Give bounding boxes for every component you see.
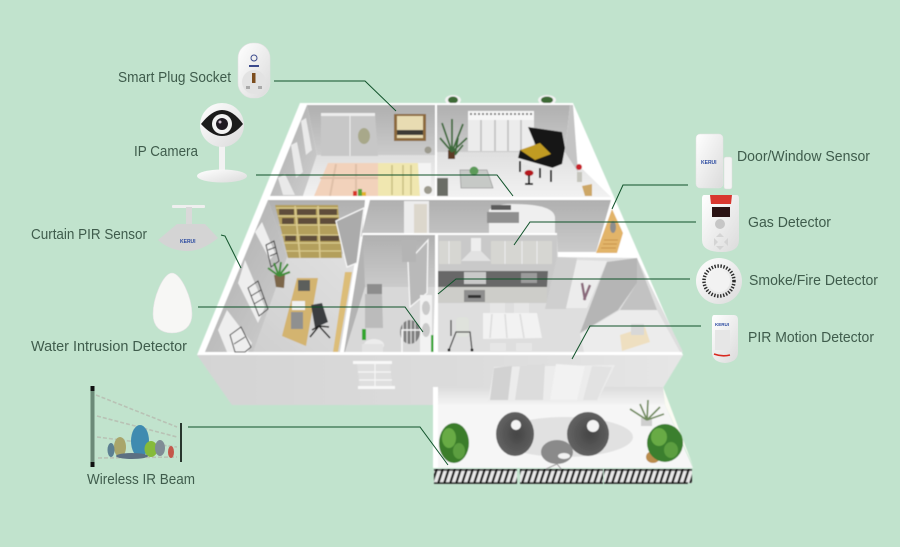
toys <box>353 189 366 196</box>
ottoman 1 <box>496 412 534 456</box>
garden shrubs behind house <box>445 95 556 105</box>
label: smoke fire: Smoke/Fire Detector <box>749 273 878 289</box>
dining chairs <box>490 303 532 351</box>
desk in right room <box>620 324 650 351</box>
picture <box>394 114 426 141</box>
house footprint wall tops <box>197 103 683 355</box>
railing <box>434 469 692 483</box>
vanity <box>420 295 432 352</box>
leader line: smoke <box>438 279 690 294</box>
open door <box>336 208 364 267</box>
washing machine <box>365 284 383 328</box>
plant left <box>439 423 469 463</box>
round table <box>541 440 573 470</box>
left wall windows <box>278 118 312 195</box>
room: bathroom <box>344 235 435 352</box>
front large patio window <box>488 364 615 402</box>
plant right <box>646 424 683 463</box>
wooden bench <box>333 272 352 352</box>
exercise equipment <box>582 283 590 300</box>
icon: smoke fire detector <box>696 258 742 304</box>
label: pir motion: PIR Motion Detector <box>748 330 874 346</box>
leader line: water <box>198 307 423 332</box>
leader line: ip camera <box>256 175 513 196</box>
leader line: gas <box>514 222 696 245</box>
dining table <box>483 313 542 339</box>
glass coffee table <box>460 166 493 188</box>
shower rail <box>402 330 422 352</box>
front small window <box>353 361 395 389</box>
icon: water intrusion detector <box>153 273 192 333</box>
windows on office wall <box>218 222 275 352</box>
side cabinet <box>437 178 448 196</box>
upper cabinets <box>439 241 552 264</box>
potted palm <box>440 119 467 159</box>
balcony back wall <box>437 387 665 405</box>
beams <box>96 395 177 458</box>
icon: pir motion detector <box>712 315 738 363</box>
leader line: smart plug <box>274 81 396 111</box>
window grilles <box>230 241 279 352</box>
label: smart plug: Smart Plug Socket <box>118 70 231 86</box>
bookshelf <box>275 205 342 258</box>
patio doors <box>468 111 534 151</box>
cartoon monsters <box>108 425 174 459</box>
leader line: door window <box>612 185 688 209</box>
doorway view <box>566 260 607 308</box>
label: door window: Door/Window Sensor <box>737 149 870 165</box>
room: office <box>205 200 365 352</box>
floor shadow <box>497 417 633 457</box>
balcony floor <box>435 405 693 468</box>
icon: wireless ir beam <box>90 386 182 467</box>
office chair <box>310 303 330 338</box>
label: gas detector: Gas Detector <box>748 215 831 231</box>
green towels <box>362 329 434 352</box>
wardrobe <box>321 113 378 156</box>
stroller <box>448 317 474 352</box>
right room back wall <box>620 258 657 310</box>
bedside lamps <box>424 146 432 194</box>
lower cabinets <box>438 287 547 303</box>
cooktop and sink <box>464 272 537 284</box>
partition wall <box>545 257 577 309</box>
balcony side wall <box>663 387 693 466</box>
leader line: ir beam <box>188 427 448 465</box>
striped rug <box>400 320 420 345</box>
icon: smart plug socket <box>238 43 270 98</box>
room: living room <box>437 105 611 197</box>
icon: curtain pir sensor <box>158 205 218 251</box>
plant back <box>630 400 664 426</box>
ottoman 2 <box>567 412 609 456</box>
grand piano <box>518 127 565 182</box>
leader line: curtain pir <box>221 235 241 268</box>
icon: door window sensor: KERUI <box>701 160 717 166</box>
doorway <box>402 240 416 262</box>
label: water intrusion: Water Intrusion Detector <box>31 339 187 355</box>
potted plant <box>268 262 290 288</box>
building illustration <box>197 95 693 483</box>
countertop <box>438 271 548 287</box>
leader line: pir motion <box>572 326 701 359</box>
icon: curtain pir sensor: KERUI <box>180 239 196 245</box>
room: kitchen and dining <box>438 235 683 352</box>
flowers and stool <box>576 164 592 196</box>
toilet <box>362 339 384 352</box>
bed <box>314 163 431 196</box>
piano stool <box>524 170 534 184</box>
icon: door window sensor <box>696 134 732 189</box>
room: hallway <box>362 200 611 252</box>
balcony left wall <box>433 387 438 468</box>
desk <box>282 278 318 346</box>
label: curtain pir: Curtain PIR Sensor <box>31 227 147 243</box>
front exterior wall <box>197 355 683 405</box>
right room floor <box>580 310 680 352</box>
right room door wall <box>580 258 637 333</box>
icon: pir motion detector: KERUI <box>715 322 729 327</box>
icon: ip camera <box>197 103 247 182</box>
room: bedroom <box>270 105 435 196</box>
balcony <box>433 387 693 483</box>
range hood <box>461 238 491 261</box>
orange door <box>596 209 623 272</box>
bathroom door <box>408 240 428 307</box>
label: ip camera: IP Camera <box>134 144 199 160</box>
label: wireless ir beam: Wireless IR Beam <box>87 472 195 488</box>
icon: gas detector <box>702 195 739 252</box>
kitchen island seen over wall <box>487 204 555 233</box>
